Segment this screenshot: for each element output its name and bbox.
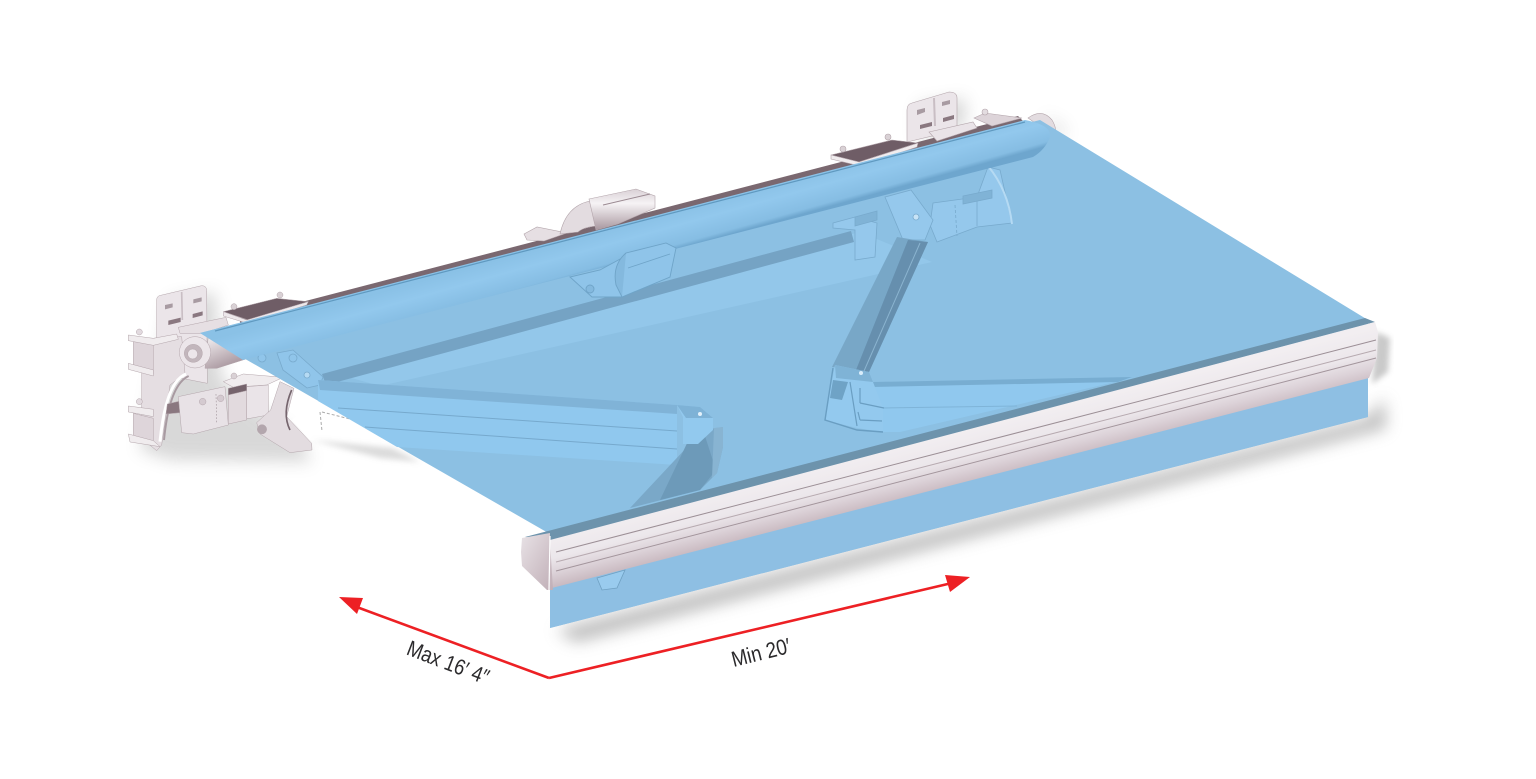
forearm [630,427,723,508]
left lower arm white end [292,400,420,462]
top mounting plate [223,298,308,320]
ghost parts under right of canopy [833,166,1012,260]
left arm shoulder through canopy [258,350,323,388]
small clamp [178,317,228,333]
top strip [525,318,1375,541]
lower block group [166,398,192,414]
rail under roller [322,231,854,385]
lower arm body [873,378,1132,432]
ghost clamp on roller [570,243,676,297]
arrow: min width [549,575,970,678]
label: max projection: Max 16′ 4″ [404,635,493,690]
arm shoulder [257,382,312,453]
roller end cap [179,337,211,368]
elbow block [825,365,883,432]
label: min width: Min 20′ [729,633,793,672]
lower arm lines [883,406,1017,408]
right arm [825,237,1132,432]
end cap [521,533,553,590]
roller top edge highlight [215,122,1025,331]
arrow: max projection [339,597,549,678]
bar body [548,322,1378,589]
lower arm top strip [873,377,1132,387]
wall plate [907,92,957,142]
centre support clamp [524,189,655,241]
valance [550,375,1368,628]
rear arm detail under bar [1175,410,1236,428]
left blocks [133,340,153,374]
end cap [1028,113,1056,136]
roller stub [205,336,245,368]
right wall bracket [831,92,1056,166]
roller tube [200,120,1050,360]
front bar [521,318,1378,590]
rear rail [240,116,1026,328]
upper arm [318,380,677,465]
upper link [832,237,928,372]
clip under front bar [597,570,625,590]
elbow [677,405,713,444]
left wall bracket [128,286,312,453]
small clamp [929,122,977,141]
canopy [200,120,1368,628]
shadow right of front bar [1372,332,1390,384]
shadow under valance [556,398,1386,642]
lighter strip behind roller [330,232,932,386]
shadow behind wall brackets [140,98,1066,462]
short plate [974,113,1022,126]
grooves [556,340,1376,571]
rear clip under bar [1236,406,1262,423]
long plate [831,140,918,162]
wall plate [157,286,207,383]
central casting [142,337,185,451]
left arm upper and fore sections [318,380,723,508]
